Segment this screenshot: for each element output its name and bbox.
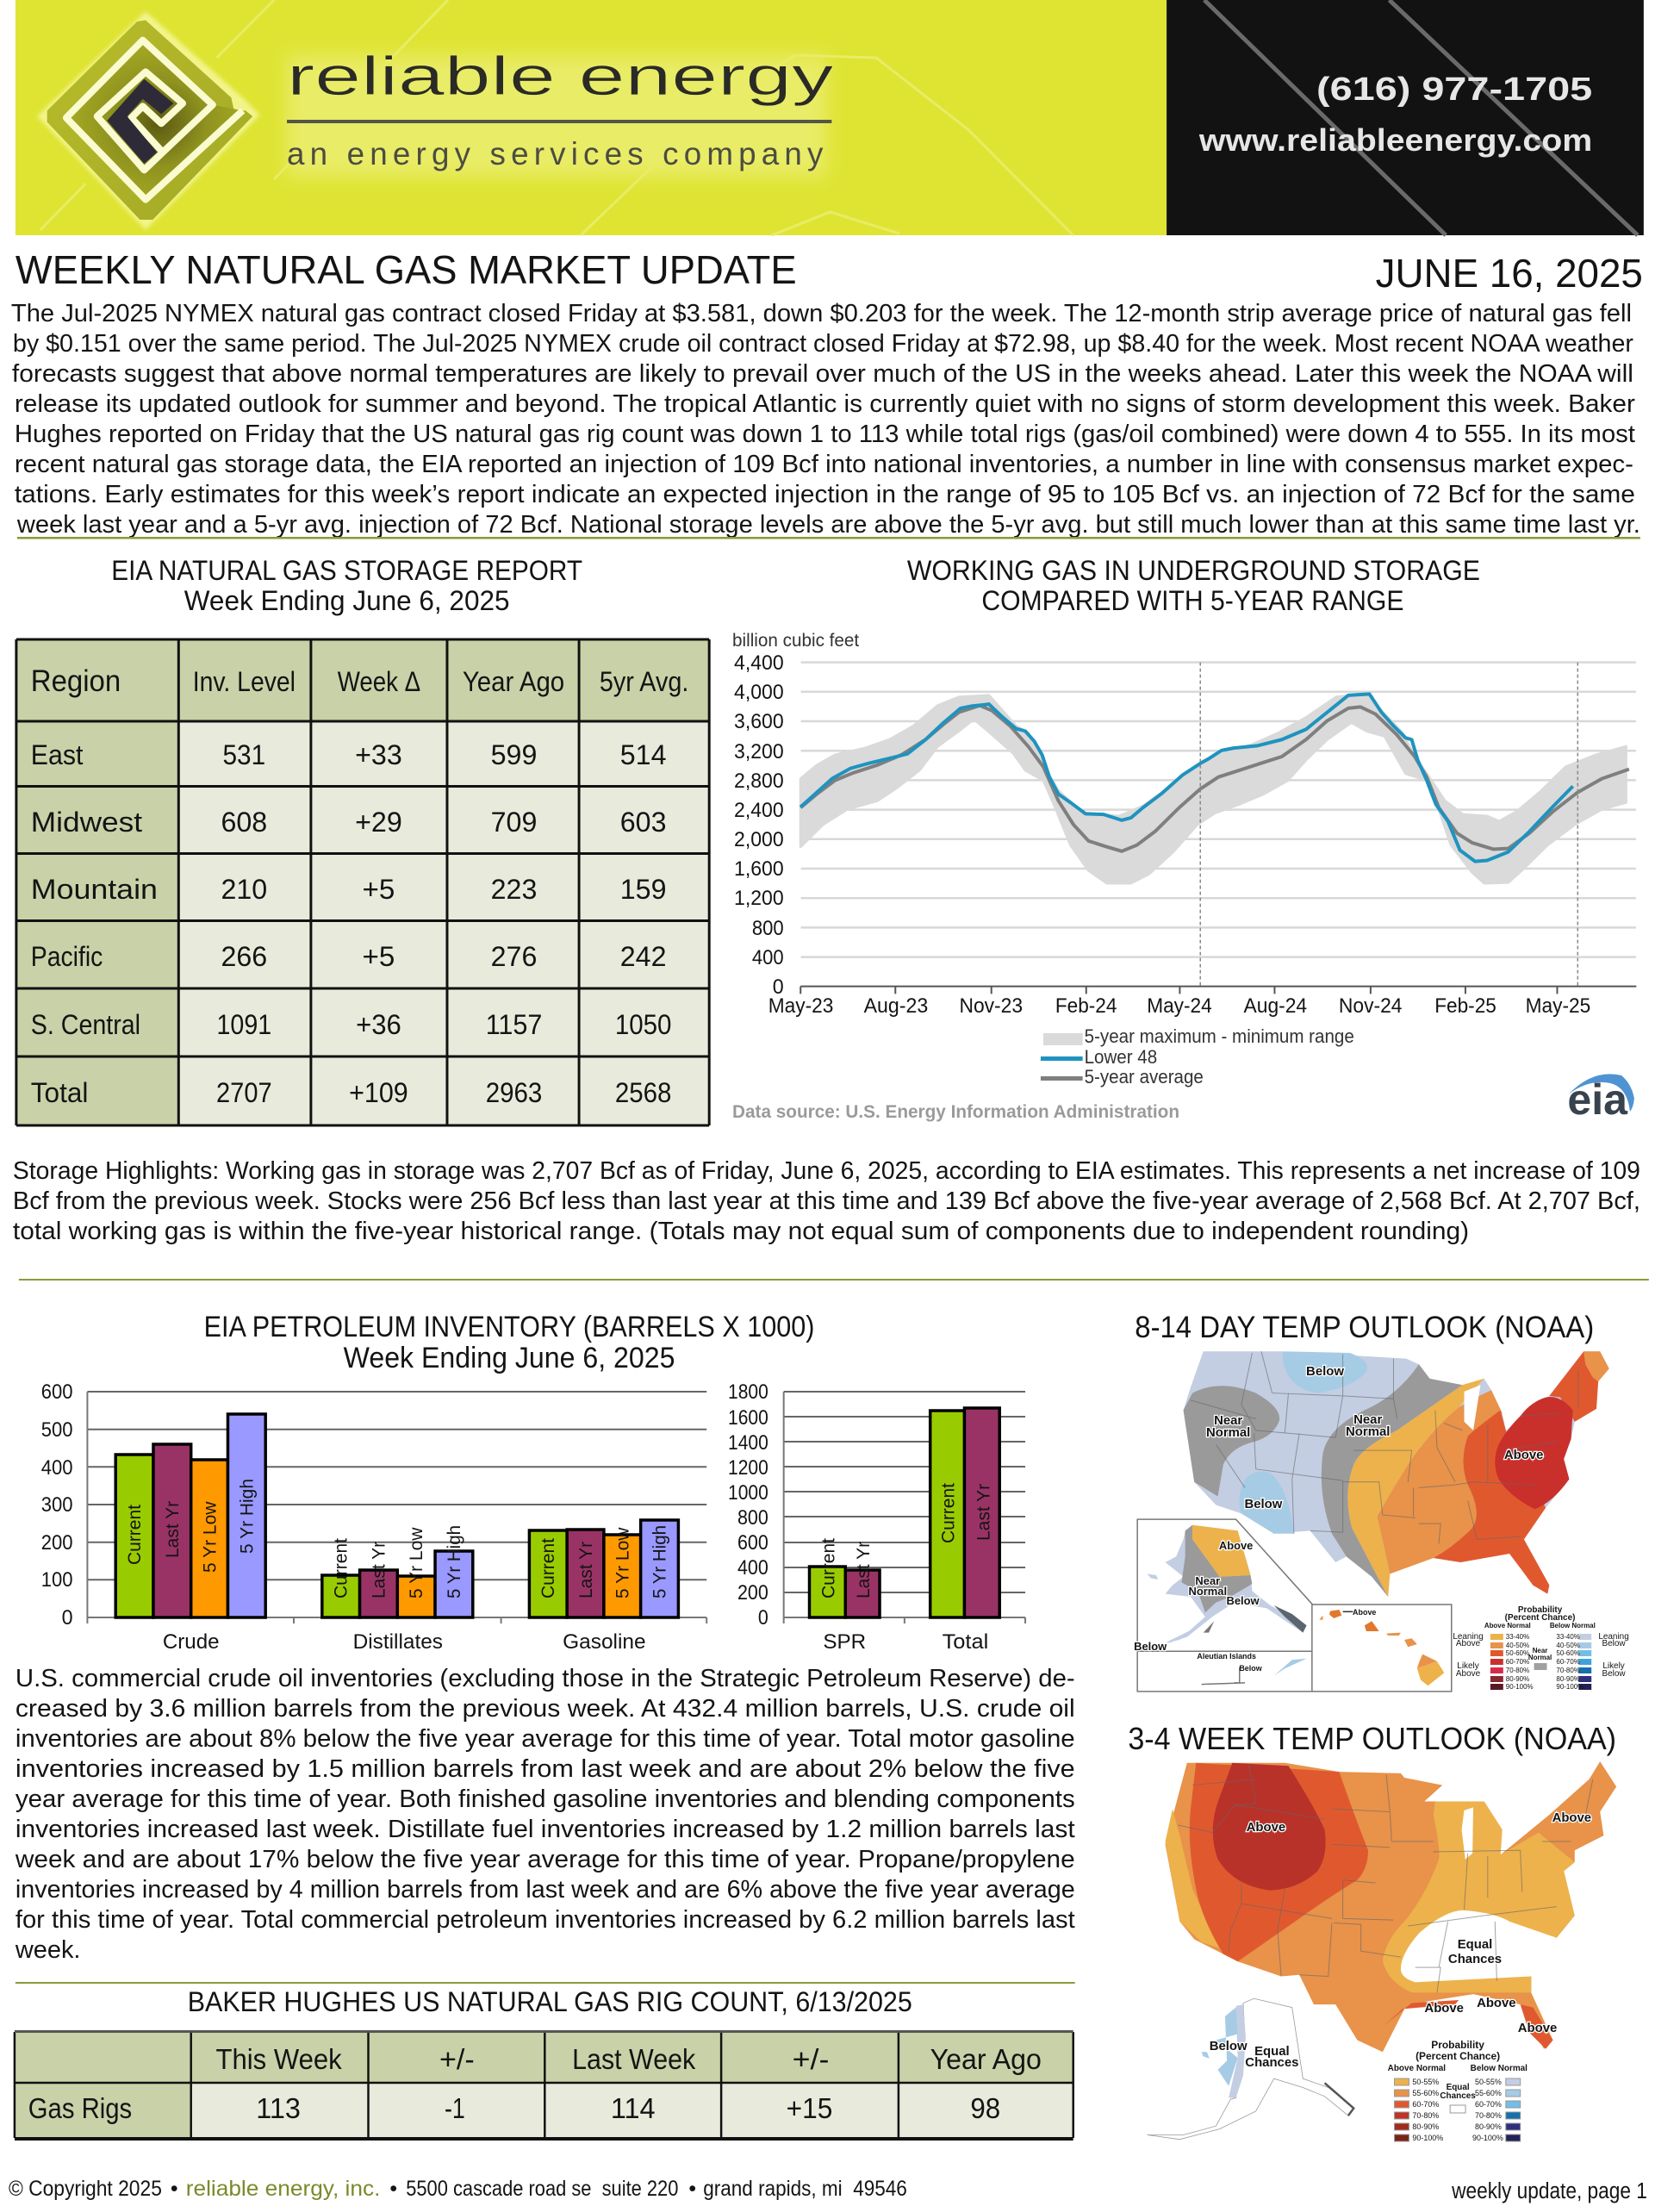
row: S. Central: 1050 (615, 1009, 671, 1040)
row: Total: Total (31, 1077, 88, 1108)
logo mark (37, 11, 260, 230)
chart: working gas in storage (732, 631, 1636, 1124)
bars: SPR and total (810, 1408, 999, 1617)
bar chart: crude, distillates, gasoline: 5 Yr Low (613, 1527, 633, 1598)
chart legend: 5-year maximum - minimum range (1085, 1025, 1354, 1047)
contact panel: (616) 977-1705 (1316, 72, 1592, 108)
footer: • (688, 2177, 696, 2201)
rig table header: Last Week (572, 2043, 696, 2075)
y axis labels (41, 1380, 73, 1630)
contiguous US shapes (1166, 1761, 1616, 2052)
x axis labels: Nov-23 (959, 994, 1023, 1018)
contiguous US shapes (1184, 1351, 1609, 1597)
y axis labels: 1,200 (734, 887, 784, 910)
market summary text: recent natural gas storage data, the EIA reported an injection of 109 Bcf into national inventories, a number in line with consensus market expec- (15, 451, 1633, 478)
map legend: 90-100% (1412, 2134, 1443, 2142)
icon: eia logo: eia (1567, 1075, 1628, 1124)
y axis labels: 1400 (728, 1431, 768, 1455)
category labels: Total (943, 1630, 988, 1654)
map legend: 33-40% (1556, 1633, 1580, 1641)
map legend: 80-90% (1556, 1675, 1580, 1683)
map legend: 50-55% (1475, 2078, 1502, 2086)
heading: 3-4 week outlook: 3-4 WEEK TEMP OUTLOOK (NOAA) (1128, 1722, 1616, 1756)
rig table header: This Week (216, 2043, 342, 2075)
y axis labels (734, 651, 784, 999)
row: Total: +109 (349, 1077, 408, 1108)
data source note: Data source: U.S. Energy Information Administration (732, 1102, 1179, 1122)
y axis labels: 200 (737, 1581, 768, 1605)
row: Midwest: Midwest (31, 807, 142, 838)
y axis labels: 400 (41, 1456, 73, 1480)
bar chart: SPR and total: Last Yr (974, 1484, 993, 1541)
map labels (1210, 1810, 1591, 2070)
bar chart: crude, distillates, gasoline: 5 Yr High (445, 1525, 464, 1598)
row: Midwest: 709 (491, 807, 537, 838)
chart: working gas in storage: billion cubic feet (732, 631, 859, 651)
rig table row: 114 (611, 2092, 656, 2124)
bar chart: crude, distillates, gasoline: Current (332, 1538, 352, 1598)
inset labels: Below (1227, 1594, 1260, 1607)
y axis labels: 3,200 (734, 740, 784, 763)
y axis labels: 1000 (728, 1481, 768, 1505)
heading: 8-14 day outlook: 8-14 DAY TEMP OUTLOOK (NOAA) (1135, 1311, 1594, 1344)
bar chart: SPR and total (728, 1380, 1025, 1654)
footer: © Copyright 2025 (9, 2177, 162, 2201)
storage highlights text: Bcf from the previous week. Stocks were 256 Bcf less than last year at this time and 139 Bcf above the five-year average of 2,568 Bcf. At 2,707 Bcf, (13, 1187, 1640, 1215)
row: Midwest: 608 (221, 807, 267, 838)
inset labels (1134, 1539, 1260, 1653)
y axis labels: 200 (41, 1531, 73, 1555)
y axis labels: 800 (737, 1506, 768, 1530)
rig table row: -1 (445, 2092, 465, 2124)
row: Pacific: 276 (491, 941, 537, 972)
map legend: Normal (1528, 1654, 1552, 1661)
y axis labels: 2,800 (734, 770, 784, 793)
row: S. Central: +36 (356, 1009, 401, 1040)
rig table row (28, 2092, 1000, 2124)
map labels: Normal (1346, 1424, 1390, 1439)
inset labels: Below (1134, 1640, 1167, 1653)
map legend: 70-80% (1475, 2111, 1502, 2120)
row: Midwest (31, 807, 666, 838)
bar chart: crude, distillates, gasoline: Last Yr (163, 1501, 183, 1558)
y axis labels: 400 (737, 1556, 768, 1580)
market summary text: The Jul-2025 NYMEX natural gas contract closed Friday at $3.581, down $0.203 for the week. The 12-month strip average price of natural gas fell (11, 300, 1632, 327)
petroleum commentary text: for this time of year. Total commercial petroleum inventories increased by 6.2 million barrels last (16, 1906, 1075, 1934)
map labels: Above (1504, 1448, 1543, 1462)
map: 3-4 week temperature outlook (1148, 1761, 1616, 2142)
map labels: Above (1247, 1820, 1285, 1835)
market summary text: by $0.151 over the same period. The Jul-2025 NYMEX crude oil contract closed Friday at $72.98, up $8.40 for the week. Most recent NOAA weather (13, 330, 1633, 358)
heading: working gas chart (907, 555, 1480, 616)
map legend: Leaning (1453, 1632, 1484, 1642)
map labels: Below (1244, 1497, 1283, 1511)
rig table row: Gas Rigs (28, 2092, 132, 2124)
table header: Year Ago (463, 666, 564, 697)
x axis labels: Feb-25 (1434, 994, 1496, 1018)
petroleum commentary text: creased by 3.6 million barrels from the previous week. At 432.4 million barrels, U.S. crude oil (16, 1695, 1075, 1723)
y axis labels: 3,600 (734, 710, 784, 733)
bars: distillates (322, 1551, 473, 1617)
map labels: Chances (1448, 1952, 1502, 1966)
map legend: 80-90% (1506, 1675, 1529, 1683)
category labels: Crude (163, 1630, 220, 1654)
petroleum commentary text: inventories are about 8% below the five year average for this time of year. Total motor gasoline (16, 1725, 1075, 1753)
title: WEEKLY NATURAL GAS MARKET UPDATE (16, 247, 797, 292)
heading: petroleum inventory: EIA PETROLEUM INVENTORY (BARRELS X 1000) (204, 1311, 814, 1343)
map legend: 60-70% (1556, 1658, 1580, 1666)
map legend: Above (1456, 1669, 1481, 1679)
footer: reliable energy, inc. (186, 2177, 380, 2201)
inset labels: Above (1219, 1539, 1253, 1552)
petroleum commentary text: inventories increased by 1.5 million barrels from last week and are about 2% below the five (16, 1755, 1075, 1783)
x axis labels: May-24 (1147, 994, 1212, 1018)
map legend: 90-100% (1506, 1683, 1534, 1691)
y axis labels: 500 (41, 1418, 73, 1442)
x axis labels: Aug-24 (1244, 994, 1307, 1018)
map labels: Equal (1458, 1937, 1492, 1952)
map labels: Normal (1206, 1425, 1250, 1440)
storage table (16, 639, 709, 1125)
Hawaii inset (1312, 1605, 1452, 1692)
footer: • (171, 2177, 178, 2201)
petroleum commentary text: inventories increased by 4 million barrels from last week and are 6% above the five year average (16, 1876, 1075, 1904)
bar chart: SPR and total: Current (939, 1483, 959, 1543)
chart legend: 5-year average (1085, 1066, 1204, 1087)
map: 8-14 day temperature outlook (1134, 1351, 1629, 1692)
map labels: Above (1518, 2021, 1557, 2035)
category labels: Gasoline (563, 1630, 646, 1654)
map labels (1206, 1364, 1543, 1511)
rig table header (216, 2043, 1042, 2075)
map legend: 40-50% (1506, 1642, 1529, 1649)
map legend: 60-70% (1412, 2100, 1439, 2109)
row: Total (31, 1077, 671, 1108)
row: S. Central: S. Central (31, 1009, 140, 1040)
row: Pacific (31, 941, 666, 972)
chart legend (1041, 1025, 1354, 1087)
footer: grand rapids, mi 49546 (703, 2177, 907, 2201)
map legend: 55-60% (1475, 2089, 1502, 2097)
footer: • (389, 2177, 397, 2201)
category labels (823, 1630, 988, 1654)
map labels: Near (1353, 1412, 1382, 1427)
map legend: 50-55% (1412, 2078, 1439, 2086)
heading: petroleum inventory: Week Ending June 6, 2025 (344, 1342, 675, 1374)
map legend: Probability (1518, 1605, 1563, 1615)
petroleum commentary text: year average for this time of year. Both finished gasoline inventories and blending components (16, 1785, 1075, 1813)
contact panel (1167, 0, 1644, 235)
bar chart: crude, distillates, gasoline (41, 1380, 706, 1654)
Alaska outline (1148, 1998, 1353, 2140)
row: Pacific: Pacific (31, 941, 103, 972)
y axis labels: 600 (41, 1380, 73, 1404)
map legend: Below Normal (1471, 2064, 1528, 2073)
bar chart: crude, distillates, gasoline: Current (538, 1538, 558, 1598)
rig table row: 113 (256, 2092, 301, 2124)
rig table row: +15 (787, 2092, 832, 2124)
petroleum commentary text (15, 1665, 1075, 1964)
storage highlights text: total working gas is within the five-year historical range. (Totals may not equal sum of components due to independent rounding) (13, 1218, 1469, 1245)
y axis labels: 4,400 (734, 651, 784, 675)
row: S. Central: 1091 (217, 1009, 271, 1040)
row: Pacific: +5 (363, 941, 395, 972)
storage highlights text (13, 1157, 1640, 1245)
map legend: (Percent Chance) (1416, 2050, 1500, 2062)
contact panel: www.reliableenergy.com (1198, 123, 1592, 158)
date: JUNE 16, 2025 (1376, 251, 1643, 296)
y axis labels: 100 (41, 1568, 73, 1592)
market summary text (11, 300, 1640, 539)
storage highlights text: Storage Highlights: Working gas in storage was 2,707 Bcf as of Friday, June 6, 2025, according to EIA estimates. This represents a net increase of 109 (13, 1157, 1640, 1185)
y axis labels: 1600 (728, 1406, 768, 1430)
x axis labels: May-23 (768, 994, 833, 1018)
map labels: Below (1306, 1364, 1344, 1379)
row: S. Central: 1157 (486, 1009, 542, 1040)
bar chart: crude, distillates, gasoline: 5 Yr Low (407, 1527, 426, 1598)
x axis labels: May-25 (1526, 994, 1590, 1018)
y axis labels: 1800 (728, 1380, 768, 1404)
heading: petroleum inventory (204, 1311, 814, 1374)
map legend: 33-40% (1506, 1633, 1529, 1641)
row: Mountain: 223 (491, 874, 537, 905)
map labels: Above (1477, 1996, 1516, 2010)
map legend: Below (1602, 1669, 1626, 1679)
heading: working gas chart: COMPARED WITH 5-YEAR RANGE (981, 585, 1403, 616)
category labels: SPR (823, 1630, 866, 1654)
row: Total: 2963 (486, 1077, 542, 1108)
table header: Inv. Level (193, 666, 296, 697)
map legend: 70-80% (1412, 2111, 1439, 2120)
row: East: 531 (222, 739, 265, 770)
map legend: (Percent Chance) (1505, 1613, 1575, 1623)
plotted series (800, 663, 1636, 994)
heading: working gas chart: WORKING GAS IN UNDERGROUND STORAGE (907, 555, 1480, 586)
map legend: 55-60% (1412, 2089, 1439, 2097)
y axis labels: 1,600 (734, 857, 784, 881)
inset labels: Near (1195, 1574, 1220, 1587)
map legend: 60-70% (1475, 2100, 1502, 2109)
row: Mountain: 159 (620, 874, 666, 905)
x axis labels (768, 994, 1590, 1018)
row: East (31, 739, 666, 770)
table header: 5yr Avg. (600, 666, 688, 697)
map legend: Equal (1447, 2083, 1470, 2092)
market summary text: tations. Early estimates for this week’s report indicate an expected injection in the range of 95 to 105 Bcf vs. an injection of 72 Bcf for the same (15, 481, 1635, 508)
tagline: an energy services company (287, 136, 824, 171)
map legend: Chances (1440, 2091, 1476, 2101)
bar chart: crude, distillates, gasoline: 5 Yr High (237, 1479, 257, 1554)
map legend: 70-80% (1556, 1667, 1580, 1674)
map: 8-14 day temperature outlook: Above (1353, 1608, 1376, 1617)
y axis labels: 2,400 (734, 799, 784, 822)
map legend: 80-90% (1475, 2122, 1502, 2131)
map legend: 90-100% (1556, 1683, 1584, 1691)
map legend: Below (1602, 1639, 1626, 1648)
row: East: 514 (620, 739, 666, 770)
petroleum commentary text: inventories increased last week. Distillate fuel inventories increased by 1.2 million barrels last (16, 1816, 1075, 1843)
petroleum commentary text: week. (15, 1936, 80, 1964)
row: East: +33 (355, 739, 402, 770)
map legend: Above Normal (1388, 2064, 1446, 2073)
row: Mountain (31, 874, 666, 905)
map legend: 80-90% (1412, 2122, 1439, 2131)
row: Total: 2707 (216, 1077, 272, 1108)
map legend: 90-100% (1472, 2134, 1503, 2142)
map legend: Near (1533, 1647, 1547, 1654)
row: Pacific: 266 (221, 941, 267, 972)
bar chart: crude, distillates, gasoline: Current (125, 1505, 145, 1565)
map legend: Likely (1457, 1661, 1479, 1671)
bars: crude (115, 1414, 265, 1617)
rig count table (15, 2030, 1073, 2141)
map legend: 50-60% (1506, 1649, 1529, 1657)
rig table row: 98 (970, 2092, 1000, 2124)
company name: reliable energy (287, 47, 834, 107)
y axis labels: 800 (752, 917, 784, 940)
rig table header: Year Ago (930, 2043, 1042, 2075)
map legend: 70-80% (1506, 1667, 1529, 1674)
market summary text: release its updated outlook for summer and beyond. The tropical Atlantic is currently quiet with no signs of storm development this week. Baker (15, 390, 1635, 418)
map labels: Above (1552, 1810, 1591, 1825)
y axis labels: 400 (752, 946, 784, 969)
bar chart: crude, distillates, gasoline: Last Yr (576, 1542, 596, 1598)
row: Mountain: +5 (363, 874, 395, 905)
Alaska inset (1137, 1519, 1312, 1692)
map labels: Near (1214, 1413, 1242, 1428)
map labels: Chances (1245, 2055, 1298, 2070)
map labels: Equal (1254, 2044, 1290, 2059)
y axis labels (728, 1380, 768, 1630)
map legend: Leaning (1598, 1632, 1629, 1642)
map legend (1388, 2039, 1528, 2142)
banner (16, 0, 1644, 235)
footer (9, 2177, 907, 2201)
map: 8-14 day temperature outlook: Aleutian Islands (1197, 1652, 1256, 1661)
row: Total: 2568 (615, 1077, 671, 1108)
map labels: Above (1424, 2001, 1464, 2016)
map legend: 60-70% (1506, 1658, 1529, 1666)
map legend: 50-60% (1556, 1649, 1580, 1657)
market summary text: Hughes reported on Friday that the US natural gas rig count was down 1 to 113 while total rigs (gas/oil combined) were down 4 to 555. In its most (15, 421, 1635, 448)
petroleum commentary text: week and are about 17% below the five year average for this time of year. Propane/propylene (15, 1846, 1075, 1873)
y axis labels: 0 (758, 1606, 768, 1630)
y axis labels: 0 (773, 975, 784, 999)
market summary text: week last year and a 5-yr avg. injection of 72 Bcf. National storage levels are above the 5-yr avg. but still much lower than at this same time last yr. (16, 511, 1640, 539)
heading: storage report (111, 555, 582, 616)
map legend (1453, 1605, 1629, 1691)
y axis labels: 600 (737, 1531, 768, 1555)
petroleum commentary text: U.S. commercial crude oil inventories (excluding those in the Strategic Petroleum Reserve) de- (16, 1665, 1075, 1692)
row: East: East (31, 739, 84, 770)
row: East: 599 (491, 739, 537, 770)
y axis labels: 0 (62, 1606, 73, 1630)
map: 8-14 day temperature outlook: Below (1239, 1664, 1262, 1673)
y axis labels: 4,000 (734, 681, 784, 704)
bar chart: crude, distillates, gasoline: 5 Yr Low (201, 1501, 221, 1573)
heading: rig count: BAKER HUGHES US NATURAL GAS RIG COUNT, 6/13/2025 (188, 1986, 912, 2017)
y axis labels: 1200 (728, 1456, 768, 1480)
bars: gasoline (529, 1520, 678, 1617)
row: Midwest: +29 (355, 807, 402, 838)
table header (31, 664, 688, 698)
x axis labels: Nov-24 (1339, 994, 1402, 1018)
heading: storage report: Week Ending June 6, 2025 (184, 585, 510, 616)
x axis labels: Aug-23 (864, 994, 928, 1018)
row: Mountain: 210 (221, 874, 267, 905)
map legend: Above (1456, 1639, 1481, 1648)
bar chart: crude, distillates, gasoline: 5 Yr High (650, 1525, 669, 1598)
bar chart: SPR and total: Last Yr (854, 1542, 874, 1598)
category labels (163, 1630, 646, 1654)
row: Pacific: 242 (620, 941, 666, 972)
map legend: Above Normal (1484, 1622, 1531, 1630)
map legend: 40-50% (1556, 1642, 1580, 1649)
category labels: Distillates (353, 1630, 443, 1654)
row: S. Central (31, 1009, 671, 1040)
footer: 5500 cascade road se suite 220 (406, 2177, 678, 2201)
market summary text: forecasts suggest that above normal temperatures are likely to prevail over much of the US in the weeks ahead. Later this week the NOAA will (12, 360, 1633, 388)
page number: weekly update, page 1 (1451, 2179, 1647, 2203)
bar chart: crude, distillates, gasoline: Last Yr (369, 1542, 389, 1598)
map labels: Below (1210, 2039, 1248, 2053)
rig table header: +/- (439, 2043, 475, 2075)
table header: Week Δ (338, 666, 420, 697)
table header: Region (31, 664, 121, 698)
bar chart: SPR and total: Current (818, 1538, 838, 1598)
map legend: Below Normal (1550, 1622, 1596, 1630)
rig table header: +/- (793, 2043, 829, 2075)
chart legend: Lower 48 (1085, 1046, 1157, 1068)
row: Midwest: 603 (620, 807, 666, 838)
inset labels: Normal (1189, 1585, 1227, 1598)
heading: storage report: EIA NATURAL GAS STORAGE REPORT (111, 555, 582, 586)
map legend: Probability (1431, 2039, 1484, 2051)
y axis labels: 2,000 (734, 828, 784, 851)
row: Mountain: Mountain (31, 874, 158, 905)
map legend: Likely (1602, 1661, 1625, 1671)
x axis labels: Feb-24 (1055, 994, 1117, 1018)
y axis labels: 300 (41, 1493, 73, 1517)
